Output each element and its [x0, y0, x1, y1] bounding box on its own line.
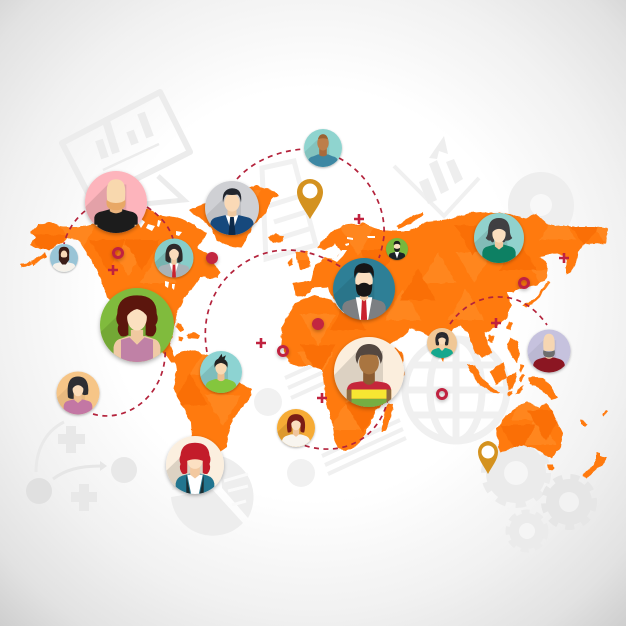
world map: [20, 185, 608, 478]
watermark: circles near Africa: [254, 388, 282, 416]
route: peach avatar to green avatar: [93, 344, 165, 416]
watermark: workflow with plus signs: [26, 422, 137, 511]
avatar: bearded man in suit on dark teal: [328, 258, 395, 322]
avatar: top person on teal: [301, 129, 342, 168]
dashed connection routes: [64, 149, 547, 449]
route: Southeast Asia arc: [450, 297, 547, 325]
route: Greenland to top avatar: [237, 149, 304, 179]
watermark: monitor with bar chart: [62, 92, 190, 204]
avatar: boy in green shirt on teal: [196, 351, 242, 394]
avatar: bald man with beard on pink: [80, 171, 147, 235]
watermark: pie chart: [171, 455, 254, 536]
route: top avatar to Europe: [339, 158, 384, 258]
route: Africa bottom arc: [296, 398, 388, 449]
avatar: red haired woman on cream: [161, 436, 224, 496]
watermark icons: [26, 92, 594, 550]
marker: plus signs: [108, 214, 569, 403]
avatar: woman in pink on peach: [53, 371, 100, 416]
route: Canada arc: [147, 207, 173, 239]
watermark: growth chart: [394, 136, 479, 216]
watermark: location pin: [508, 172, 574, 231]
route: large Atlantic arc: [205, 250, 341, 352]
map white gaps: Arctic islands, Baltic and lakes: [138, 218, 375, 290]
avatar: woman with wavy hair on green: [94, 288, 174, 364]
avatar: man in striped shirt on cream: [328, 337, 404, 409]
avatar: woman with red tie on teal: [151, 238, 194, 279]
watermark: globe: [405, 339, 507, 441]
avatar: small man in suit on green: [386, 238, 408, 260]
marker: ring dots: [114, 248, 528, 398]
icon: location pin bottom: [478, 441, 498, 474]
avatar: woman in green on teal: [470, 213, 524, 265]
avatar: older bald man on lilac: [524, 329, 571, 374]
avatar: man in blue suit on grey: [200, 181, 259, 237]
watermark: document behind Greenland: [262, 161, 316, 259]
watermark: striped document: [285, 360, 406, 474]
icon: location pin top: [297, 179, 323, 219]
watermark: gears: [485, 442, 594, 550]
avatar: small bearded man on blue: [50, 244, 78, 272]
avatar: woman in teal blouse on peach: [427, 328, 457, 358]
marker: red dots: [206, 252, 324, 330]
route: Alaska arc: [64, 211, 85, 244]
avatar: woman in white on orange: [274, 409, 315, 448]
